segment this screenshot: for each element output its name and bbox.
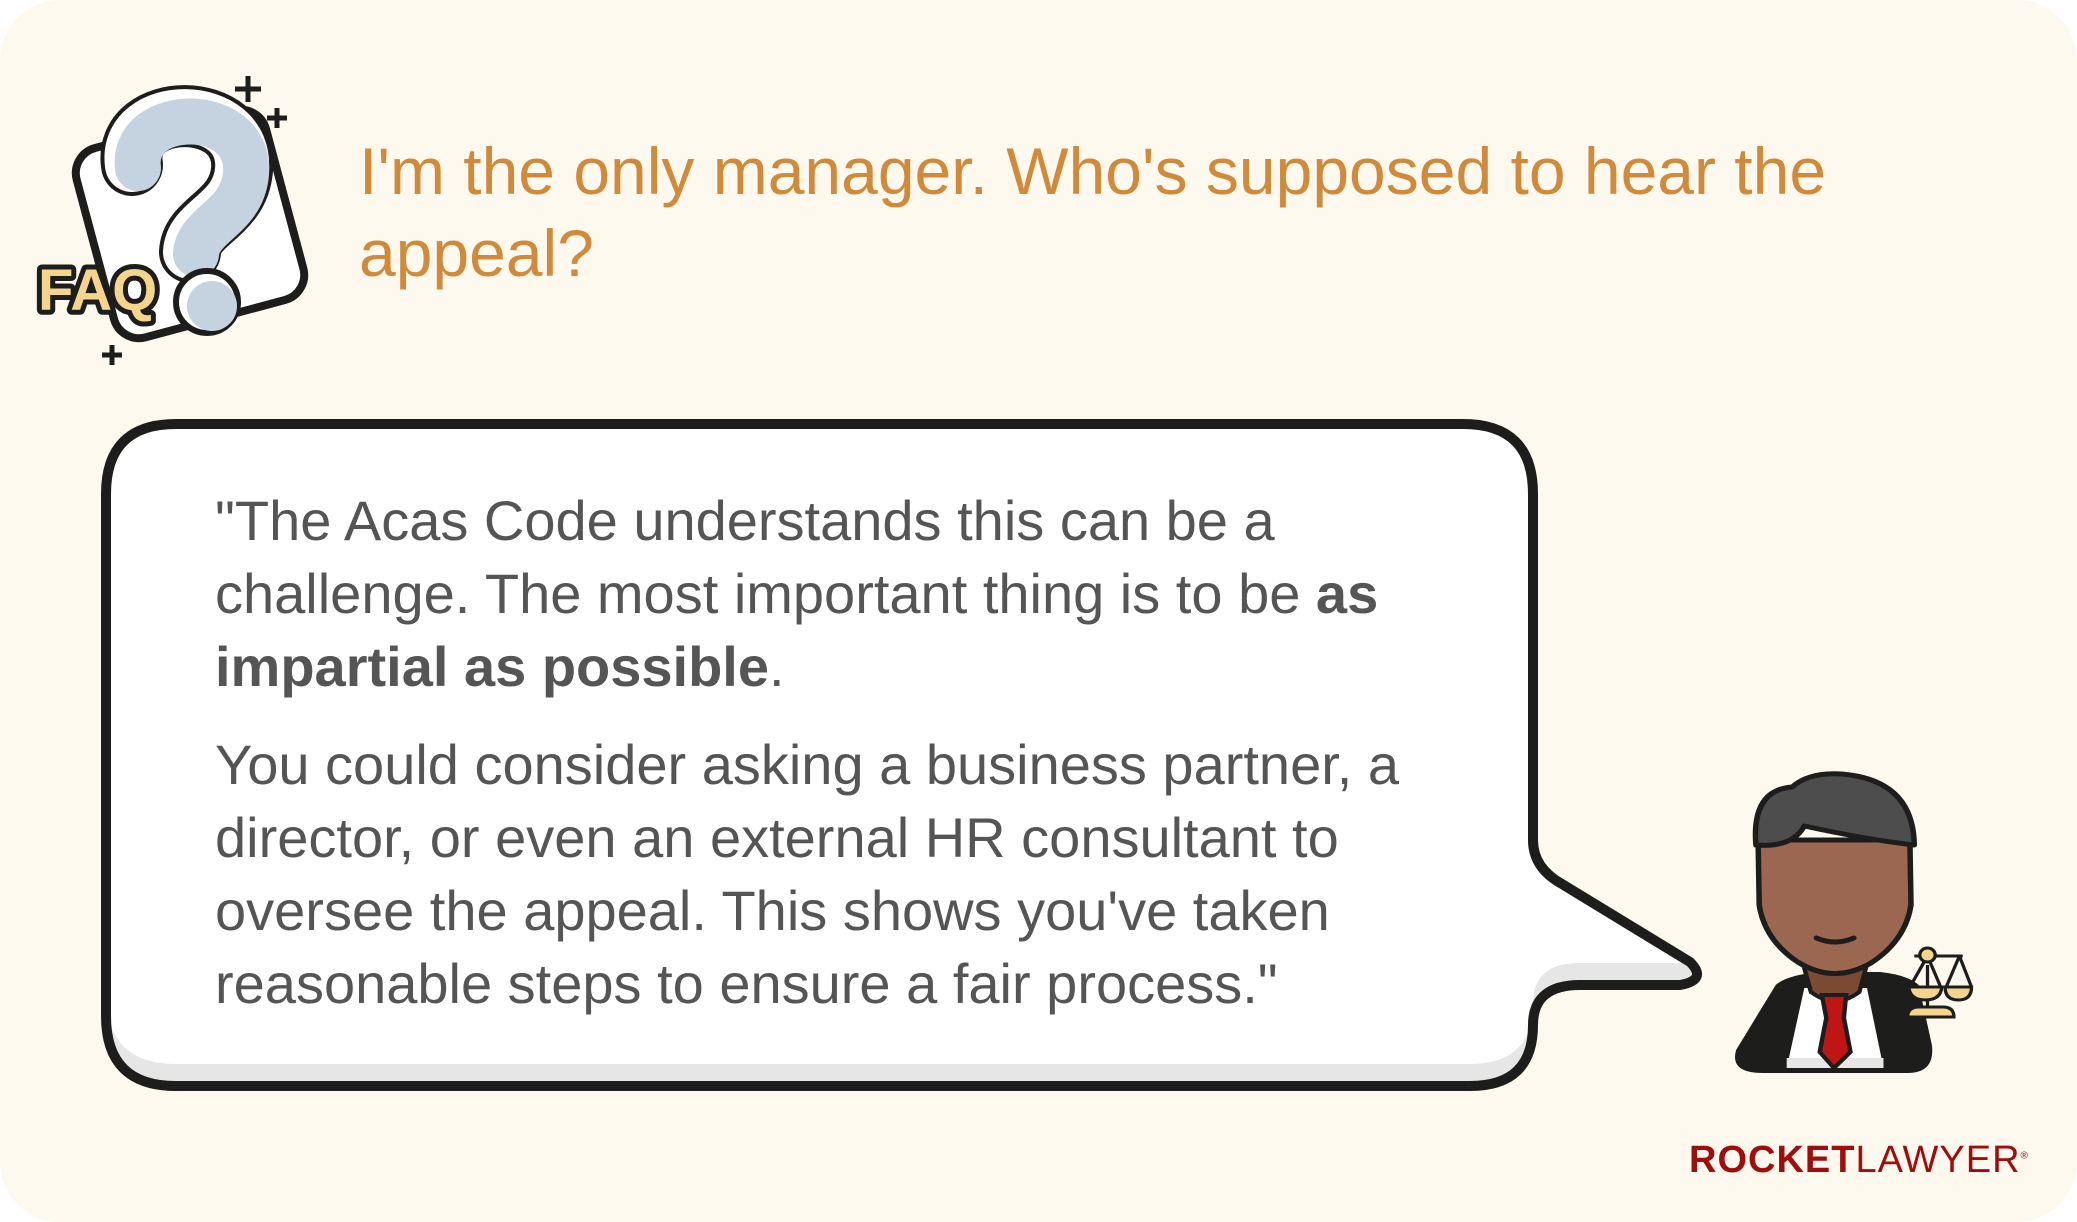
logo: ROCKETLAWYER® (1689, 1139, 2029, 1181)
speech bubble (101, 419, 1702, 1091)
title: I'm the only manager. Who's supposed to hear the (359, 134, 1826, 208)
quote text: You could consider asking a business partner, a (215, 733, 1399, 796)
quote text: director, or even an external HR consultant to (215, 806, 1339, 869)
sparkles (102, 76, 287, 365)
quote text: challenge. The most important thing is to be as (215, 562, 1378, 625)
quote text: reasonable steps to ensure a fair process." (215, 952, 1278, 1015)
quote text: impartial as possible. (215, 635, 785, 698)
icon: FAQ question mark (36, 76, 308, 365)
title: appeal? (359, 216, 594, 290)
icon: FAQ question mark: FAQ (38, 258, 157, 323)
quote text (215, 489, 1400, 1015)
icon: lawyer with scales (1735, 771, 1974, 1073)
quote text: oversee the appeal. This shows you've taken (215, 879, 1330, 942)
quote text: "The Acas Code understands this can be a (215, 489, 1275, 552)
title (359, 134, 1826, 290)
